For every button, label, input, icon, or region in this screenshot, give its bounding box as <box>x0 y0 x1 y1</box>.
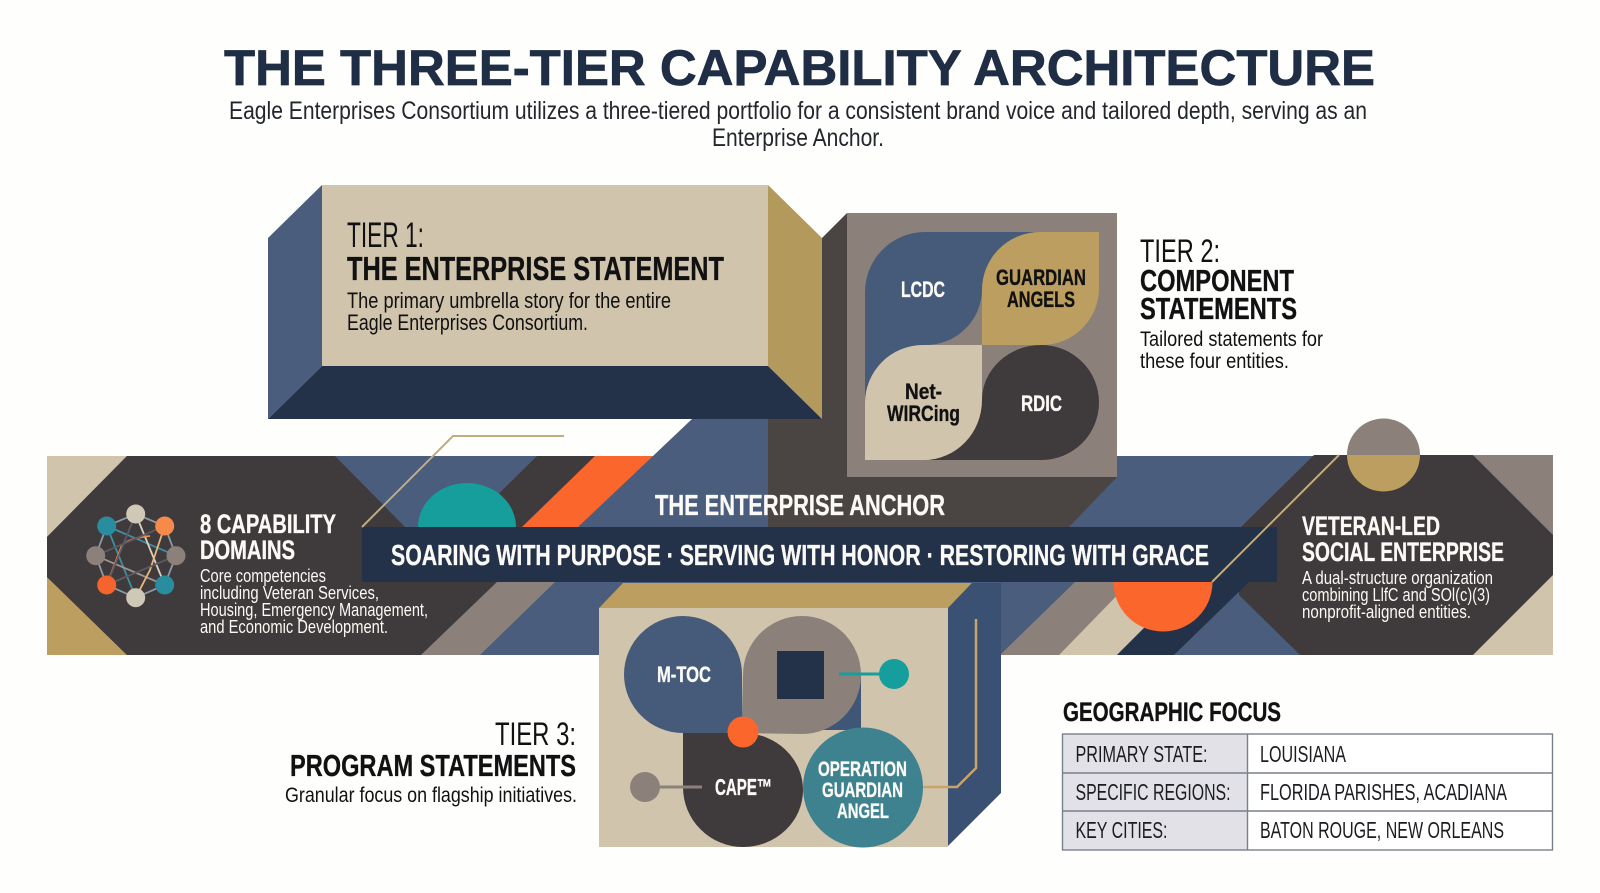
text: 8 capability domains: Core competencies <box>200 566 326 586</box>
text: veteran-led social enterprise: nonprofit-aligned entities. <box>1302 602 1471 622</box>
tagline bar: SOARING WITH PURPOSE · SERVING WITH HONOR · RESTORING WITH GRACE <box>391 540 1209 572</box>
top gold circle <box>1347 418 1420 492</box>
text: 8 capability domains: DOMAINS <box>200 535 295 565</box>
tier 2 label <box>1140 233 1323 373</box>
Guardian Angels shape: GUARDIAN <box>996 265 1086 290</box>
M-TOC shape: M-TOC <box>657 662 711 687</box>
orange dot <box>728 716 758 748</box>
panel: geographic focus <box>1062 697 1552 850</box>
subtitle <box>229 97 1367 152</box>
geographic focus table: SPECIFIC REGIONS: <box>1076 779 1230 805</box>
text: veteran-led social enterprise: VETERAN-LED <box>1302 511 1440 541</box>
Guardian Angels shape: ANGELS <box>1007 287 1075 312</box>
Guardian Angels shape <box>982 232 1099 345</box>
text: veteran-led social enterprise: A dual-structure organization <box>1302 568 1493 588</box>
title: THE THREE-TIER CAPABILITY ARCHITECTURE <box>224 40 1375 96</box>
teal semicircle <box>418 483 516 527</box>
text: 8 capability domains: 8 CAPABILITY <box>200 509 336 539</box>
icon: capability network <box>86 504 186 607</box>
orange stripe <box>522 456 653 527</box>
left gold callout line <box>362 436 564 527</box>
text: 8 capability domains: including Veteran Services, <box>200 583 379 603</box>
panel: enterprise anchor banner <box>47 213 1553 655</box>
banner heading: THE ENTERPRISE ANCHOR <box>655 490 945 522</box>
tier 3 label: TIER 3: <box>495 716 576 752</box>
CAPE shape <box>683 733 803 847</box>
tier 2 label: these four entities. <box>1140 350 1289 373</box>
dark column behind tier 2 <box>768 213 1117 527</box>
text: 8 capability domains <box>200 509 428 637</box>
Net-WIRCing shape <box>865 345 982 460</box>
RDIC shape: RDIC <box>1021 391 1062 416</box>
dark stripe <box>465 456 595 527</box>
lower right stripes <box>1000 582 1300 655</box>
right corner triangles <box>1473 455 1553 655</box>
tier 1 description: The primary umbrella story for the entire <box>347 288 671 313</box>
geographic focus table: FLORIDA PARISHES, ACADIANA <box>1260 779 1507 805</box>
Operation Guardian Angel circle: OPERATION <box>818 758 907 781</box>
tagline bar <box>362 527 1277 582</box>
tier 2 label: STATEMENTS <box>1140 291 1297 326</box>
M-TOC shape <box>624 616 743 733</box>
gold connector line <box>923 619 976 787</box>
RDIC shape <box>930 345 1099 460</box>
orange semicircle <box>1114 582 1212 632</box>
Operation Guardian Angel circle: ANGEL <box>837 800 889 823</box>
LCDC shape <box>865 232 1040 400</box>
text: 8 capability domains: Housing, Emergency Management, <box>200 600 428 620</box>
subtitle: Eagle Enterprises Consortium utilizes a three-tiered portfolio for a consistent brand voice and tailored depth, serving as an <box>229 97 1367 125</box>
geographic focus table <box>1062 734 1552 850</box>
text: 8 capability domains: and Economic Development. <box>200 617 388 637</box>
text: veteran-led social enterprise: combining LlfC and SOl(c)(3) <box>1302 585 1490 605</box>
Net-WIRCing shape: Net- <box>905 379 942 404</box>
tier 3 label: PROGRAM STATEMENTS <box>290 748 576 783</box>
text: veteran-led social enterprise <box>1302 511 1504 622</box>
tier 3 label: Granular focus on flagship initiatives. <box>285 784 577 807</box>
right dark hexagon <box>1239 455 1553 655</box>
Net-WIRCing shape: WIRCing <box>887 401 960 426</box>
panel: tier 3 block <box>599 583 1001 848</box>
left corner triangles <box>47 456 127 655</box>
subtitle: Enterprise Anchor. <box>712 124 884 152</box>
taupe connector node <box>630 772 702 802</box>
teal connector node <box>839 659 909 689</box>
tier 1 heading <box>347 216 724 287</box>
tier 2 label: Tailored statements for <box>1140 328 1323 351</box>
geographic focus table: KEY CITIES: <box>1076 817 1168 843</box>
text: veteran-led social enterprise: SOCIAL ENTERPRISE <box>1302 537 1504 567</box>
tier 1 description: Eagle Enterprises Consortium. <box>347 310 588 335</box>
geographic focus table: PRIMARY STATE: <box>1076 741 1208 767</box>
CAPE shape: CAPE™ <box>715 774 772 800</box>
tier 1 heading: THE ENTERPRISE STATEMENT <box>347 250 724 287</box>
panel: tier 2 block <box>847 213 1117 477</box>
tier 2 label: COMPONENT <box>1140 263 1294 298</box>
tier 1 heading: TIER 1: <box>347 216 424 255</box>
geographic focus heading: GEOGRAPHIC FOCUS <box>1063 697 1281 727</box>
tier 2 label: TIER 2: <box>1140 233 1220 269</box>
panel: tier 1 block <box>268 185 822 419</box>
geographic focus table: LOUISIANA <box>1260 741 1346 767</box>
tier 3 label <box>285 716 577 807</box>
left dark hexagon <box>47 456 497 655</box>
LCDC shape: LCDC <box>901 277 945 302</box>
left taupe stripe <box>421 582 555 655</box>
taupe shape with navy square <box>743 616 861 734</box>
Operation Guardian Angel circle <box>803 728 923 848</box>
right gold callout line <box>1212 455 1339 582</box>
Operation Guardian Angel circle: GUARDIAN <box>822 779 903 802</box>
tier 1 description <box>347 288 671 335</box>
